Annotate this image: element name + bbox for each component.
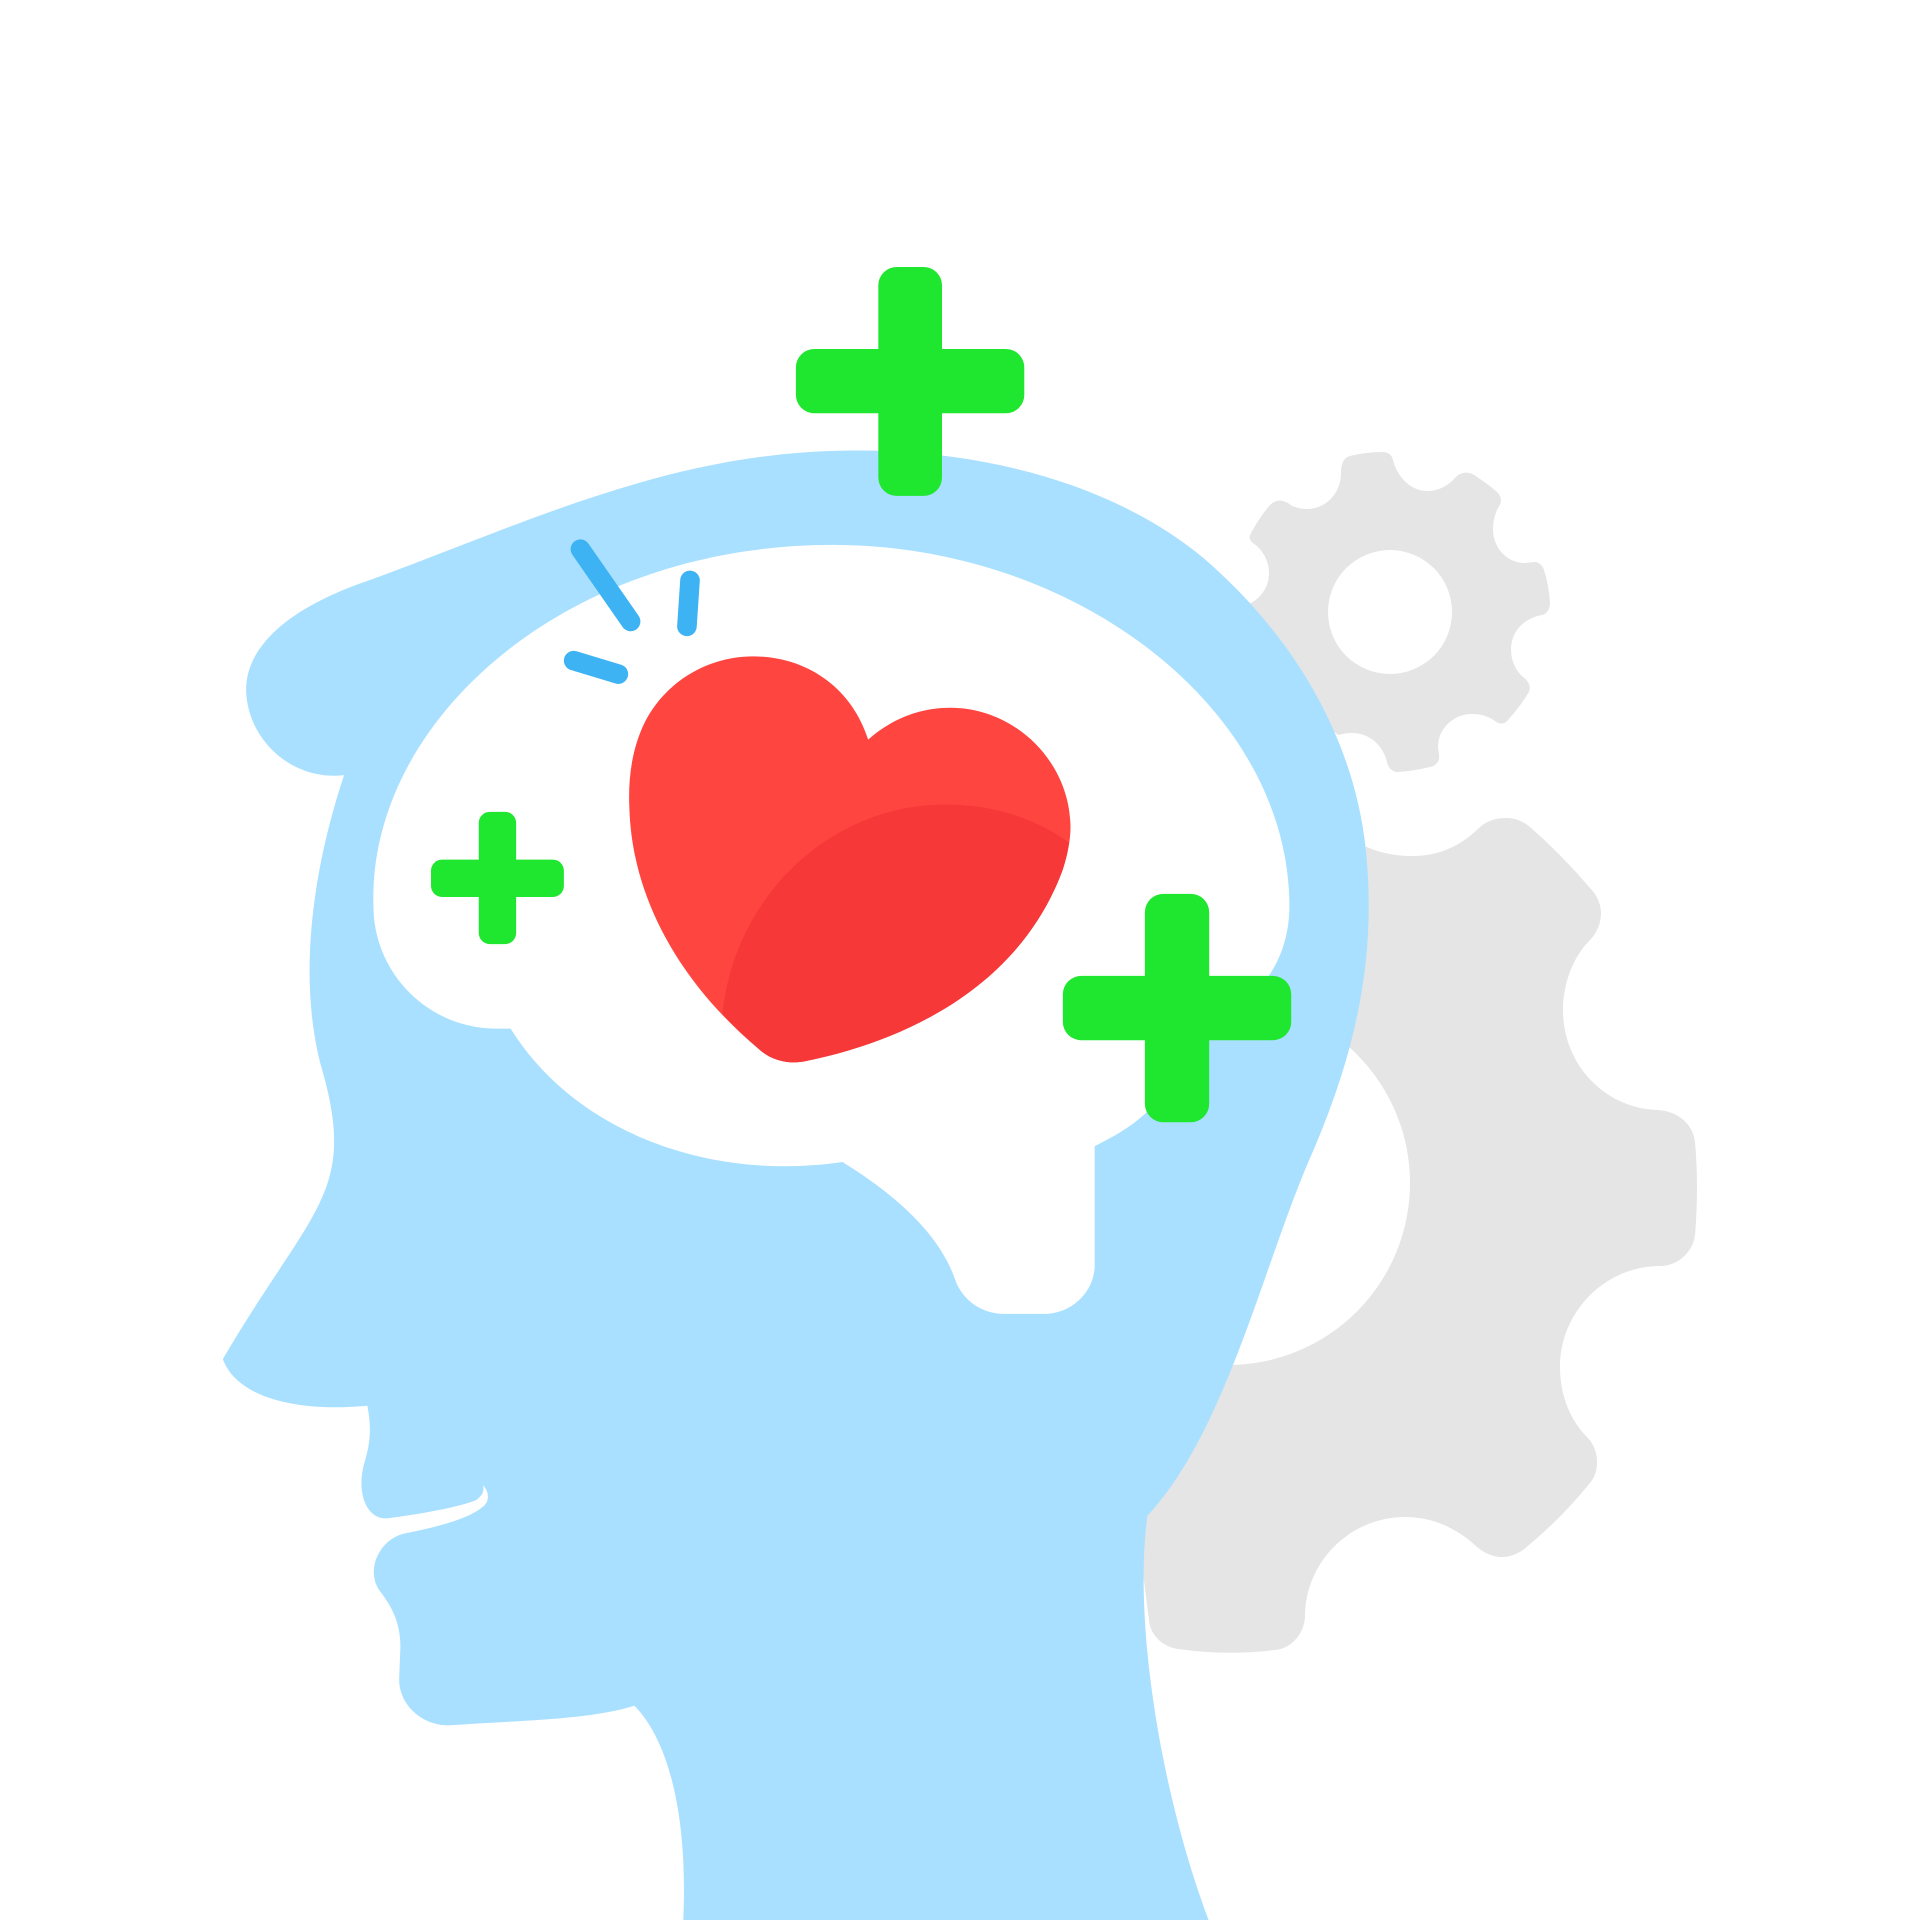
icon: left plus sign [431,812,564,944]
icon: top plus sign [796,267,1024,496]
icon: sparkle lines [574,549,690,674]
brain area (white) [373,545,1289,1314]
icon: right plus sign [1063,894,1291,1122]
icon: large gear [1046,818,1697,1653]
icon: heart [629,656,1071,1062]
head silhouette [223,450,1369,1920]
icon: small gear [1240,452,1550,772]
